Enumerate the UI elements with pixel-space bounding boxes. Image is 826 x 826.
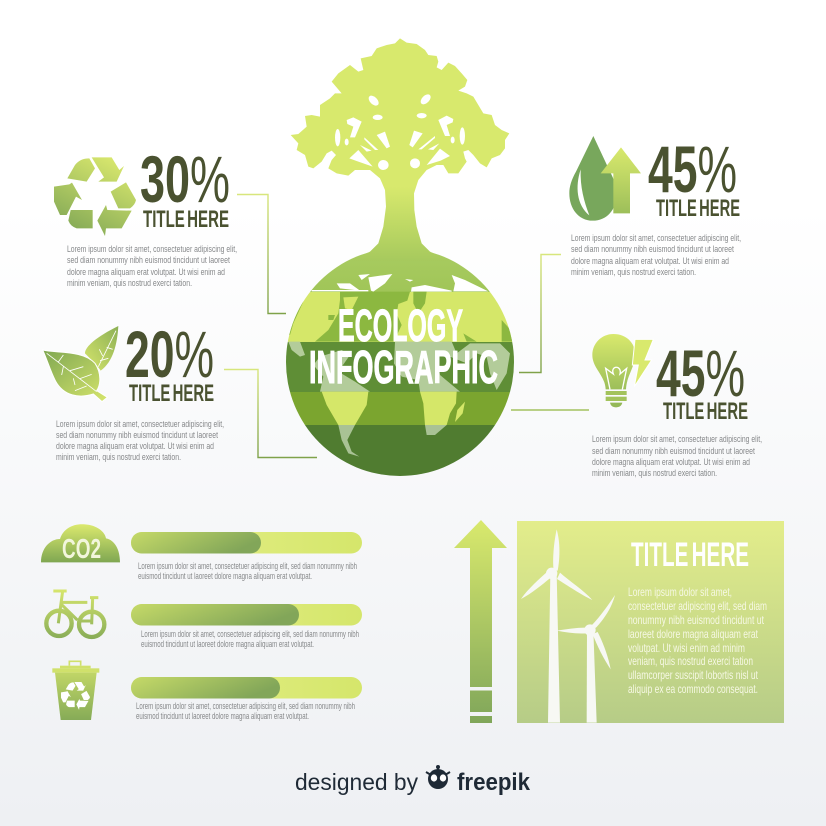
panel: 45% energy	[592, 334, 762, 478]
panel: bicycle row	[46, 591, 362, 649]
title: TITLE HERE	[129, 380, 214, 407]
icon: CO2 cloud: CO2	[62, 533, 101, 564]
icon: freepik logo	[426, 765, 450, 789]
body text: Lorem ipsum dolor sit amet, consectetuer adipiscing elit,	[592, 433, 762, 444]
panel body text	[628, 586, 767, 696]
body text: minim veniam, quis nostrud exerci tation.	[571, 266, 696, 277]
body text	[592, 433, 762, 478]
body text: minim veniam, quis nostrud exerci tation.	[67, 277, 192, 288]
body text: sed diam nonummy nibh euismod tincidunt ut laoreet	[571, 243, 734, 254]
panel title: TITLE HERE	[631, 536, 749, 574]
panel body text: aliquip ex ea commodo consequat.	[628, 683, 758, 696]
footer credit: freepik	[457, 769, 531, 796]
panel body text: laoreet dolore magna aliquam erat	[628, 628, 759, 641]
body text: Lorem ipsum dolor sit amet, consectetuer adipiscing elit,	[67, 243, 237, 254]
panel: 30% recycling	[54, 142, 237, 288]
body text	[136, 700, 355, 721]
panel body text: ullamcorper suscipit lobortis nisl ut	[628, 669, 759, 682]
progress bar	[131, 604, 362, 626]
panel: recycling bin row	[52, 661, 362, 721]
icon: bicycle	[46, 591, 104, 637]
percentage: 20%: 20%	[125, 317, 214, 391]
body text	[56, 418, 224, 462]
title: TITLE HERE	[143, 206, 229, 233]
progress bar	[131, 532, 362, 554]
connector lines	[224, 194, 589, 458]
arrow: upward	[454, 520, 507, 723]
progress bar	[131, 677, 362, 698]
globe title	[309, 300, 498, 393]
tree	[291, 38, 509, 262]
icon: water drop and arrow	[569, 136, 641, 221]
icon: wind turbines	[521, 529, 615, 723]
body text: minim veniam, quis nostrud exerci tation.	[56, 451, 181, 462]
panel body text: Lorem ipsum dolor sit amet,	[628, 586, 732, 599]
body text: Lorem ipsum dolor sit amet, consectetuer adipiscing elit, sed diam nonummy nibh	[136, 700, 355, 711]
panel: CO2 row	[41, 524, 362, 581]
panel background	[517, 521, 784, 723]
percentage: 45%: 45%	[648, 132, 737, 206]
panel body text: consectetuer adipiscing elit, sed diam	[628, 600, 767, 613]
body text: Lorem ipsum dolor sit amet, consectetuer adipiscing elit, sed diam nonummy nibh	[138, 560, 357, 571]
body text: dolore magna aliquam erat volutpat. Ut wisi enim ad	[571, 255, 729, 266]
icon: CO2 cloud	[41, 524, 120, 564]
panel: wind energy	[517, 521, 784, 723]
icon: recycle	[54, 157, 136, 236]
body text: Lorem ipsum dolor sit amet, consectetuer adipiscing elit,	[571, 232, 741, 243]
icon: leaves	[43, 326, 118, 402]
body text: minim veniam, quis nostrud exerci tation.	[592, 467, 717, 478]
body text: dolore magna aliquam erat volutpat. Ut wisi enim ad	[67, 266, 225, 277]
title: TITLE HERE	[656, 195, 740, 222]
globe	[286, 252, 514, 476]
panel body text: volutpat. Ut wisi enim ad minim	[628, 642, 745, 655]
body text	[141, 628, 359, 649]
title: TITLE HERE	[663, 398, 748, 425]
body text: sed diam nonummy nibh euismod tincidunt ut laoreet	[67, 254, 230, 265]
percentage: 45%: 45%	[656, 336, 745, 410]
body text: Lorem ipsum dolor sit amet, consectetuer adipiscing elit, sed diam nonummy nibh	[141, 628, 359, 639]
panel: 45% water	[569, 132, 741, 277]
body text: euismod tincidunt ut laoreet dolore magna aliquam erat volutpat.	[136, 710, 309, 721]
body text: dolore magna aliquam erat volutpat. Ut wisi enim ad	[592, 456, 750, 467]
body text: euismod tincidunt ut laoreet dolore magna aliquam erat volutpat.	[138, 570, 312, 581]
body text	[67, 243, 237, 288]
panel body text: nonummy nibh euismod tincidunt ut	[628, 614, 765, 627]
percentage: 30%: 30%	[140, 142, 230, 216]
panel: 20% leaves	[43, 317, 224, 462]
footer credit	[295, 765, 531, 796]
body text	[571, 232, 741, 277]
icon: recycling bin	[52, 661, 99, 720]
body text	[138, 560, 357, 581]
body text: sed diam nonummy nibh euismod tincidunt ut laoreet	[56, 429, 218, 440]
globe title: ECOLOGY	[338, 300, 463, 351]
body text: sed diam nonummy nibh euismod tincidunt ut laoreet	[592, 445, 755, 456]
body text: Lorem ipsum dolor sit amet, consectetuer adipiscing elit,	[56, 418, 224, 429]
icon: light bulb and bolt	[592, 334, 653, 407]
globe title: INFOGRAPHIC	[309, 341, 498, 393]
body text: dolore magna aliquam erat volutpat. Ut wisi enim ad	[56, 440, 214, 451]
footer credit: designed by	[295, 769, 418, 795]
body text: euismod tincidunt ut laoreet dolore magna aliquam erat volutpat.	[141, 638, 314, 649]
panel body text: veniam, quis nostrud exerci tation	[628, 655, 753, 668]
